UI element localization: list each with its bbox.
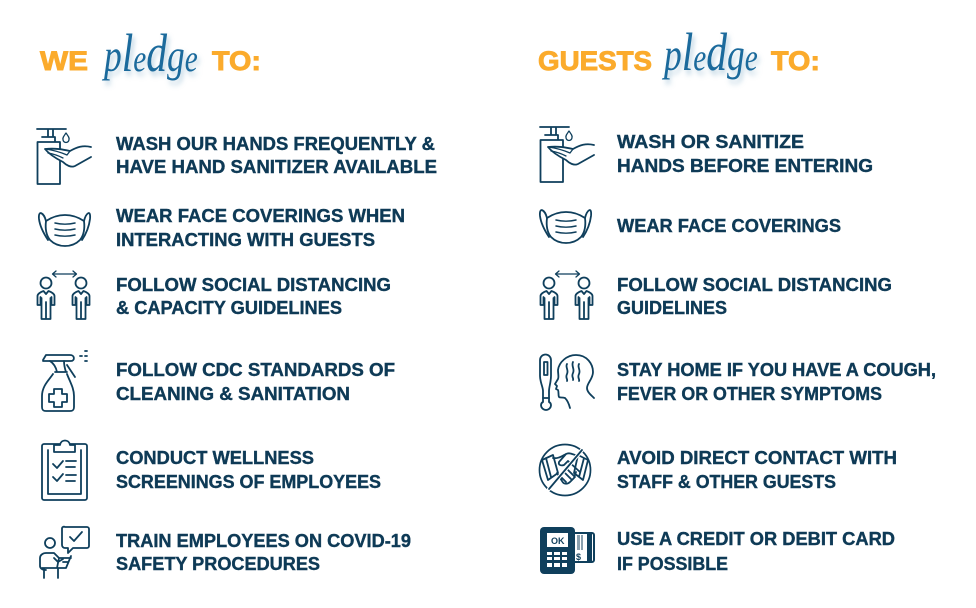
text: credit card <box>617 529 895 574</box>
panel: guests pledge <box>538 23 936 574</box>
text: wellness screenings: CONDUCT WELLNESS <box>116 448 314 468</box>
text: credit card: USE A CREDIT OR DEBIT CARD <box>617 529 895 549</box>
icon: card reader: OK <box>551 536 565 546</box>
text: social distancing <box>116 275 391 318</box>
icon: no handshake <box>540 444 590 496</box>
icon: face mask <box>39 213 90 246</box>
icon: hand sanitizer <box>540 127 594 182</box>
text: face coverings: WEAR FACE COVERINGS WHEN <box>116 206 405 226</box>
icon: face mask <box>540 210 591 243</box>
icon: thermometer and head <box>540 354 594 410</box>
text: social distancing: FOLLOW SOCIAL DISTANCING <box>116 275 391 295</box>
text: avoid contact: STAFF & OTHER GUESTS <box>617 472 836 492</box>
icon: social distancing <box>38 271 90 319</box>
heading: guests pledge to <box>538 23 820 82</box>
icon: spray bottle <box>42 351 87 411</box>
icon: clipboard <box>42 440 87 500</box>
text: social distancing guidelines: FOLLOW SOCIAL DISTANCING <box>617 275 892 295</box>
heading: we pledge to: TO: <box>212 46 261 76</box>
panel: we pledge <box>37 24 437 578</box>
icon: training <box>40 527 89 578</box>
text: stay home: FEVER OR OTHER SYMPTOMS <box>617 384 882 404</box>
heading: we pledge to: WE <box>40 46 88 76</box>
text: face coverings: INTERACTING WITH GUESTS <box>116 230 375 250</box>
text: social distancing guidelines: GUIDELINES <box>617 298 727 318</box>
text: wash hands <box>116 134 437 177</box>
text: credit card: IF POSSIBLE <box>617 554 728 574</box>
text: wash hands: WASH OUR HANDS FREQUENTLY & <box>116 134 435 154</box>
text: train employees: SAFETY PROCEDURES <box>116 554 320 574</box>
text: stay home <box>617 360 936 404</box>
icon: social distancing <box>540 271 592 319</box>
heading: guests pledge to: GUESTS <box>538 46 652 76</box>
text: train employees: TRAIN EMPLOYEES ON COVID-19 <box>116 531 411 551</box>
text: avoid contact <box>617 448 897 492</box>
text: social distancing guidelines <box>617 275 892 318</box>
icon: card reader: $ <box>576 552 581 562</box>
text: wash hands: HAVE HAND SANITIZER AVAILABLE <box>116 157 437 177</box>
heading: guests pledge to: pledge <box>661 23 758 82</box>
text: wellness screenings <box>116 448 381 492</box>
text: wear face coverings: WEAR FACE COVERINGS <box>617 216 841 236</box>
text: face coverings <box>116 206 405 250</box>
text: stay home: STAY HOME IF YOU HAVE A COUGH, <box>617 360 936 380</box>
heading: we pledge to: pledge <box>101 24 198 83</box>
text: social distancing: & CAPACITY GUIDELINES <box>116 298 342 318</box>
text: avoid contact: AVOID DIRECT CONTACT WITH <box>617 448 897 468</box>
heading: we pledge to <box>40 24 261 83</box>
text: wash or sanitize: WASH OR SANITIZE <box>617 132 804 152</box>
icon: card reader <box>540 527 594 574</box>
text: wellness screenings: SCREENINGS OF EMPLOYEES <box>116 472 381 492</box>
text: wash or sanitize: HANDS BEFORE ENTERING <box>617 156 873 176</box>
heading: guests pledge to: TO: <box>771 46 820 76</box>
icon: hand sanitizer <box>37 129 91 184</box>
text: cdc standards: CLEANING & SANITATION <box>116 384 350 404</box>
text: cdc standards <box>116 360 395 404</box>
text: cdc standards: FOLLOW CDC STANDARDS OF <box>116 360 395 380</box>
text: train employees <box>116 531 411 574</box>
text: wash or sanitize <box>617 132 873 176</box>
